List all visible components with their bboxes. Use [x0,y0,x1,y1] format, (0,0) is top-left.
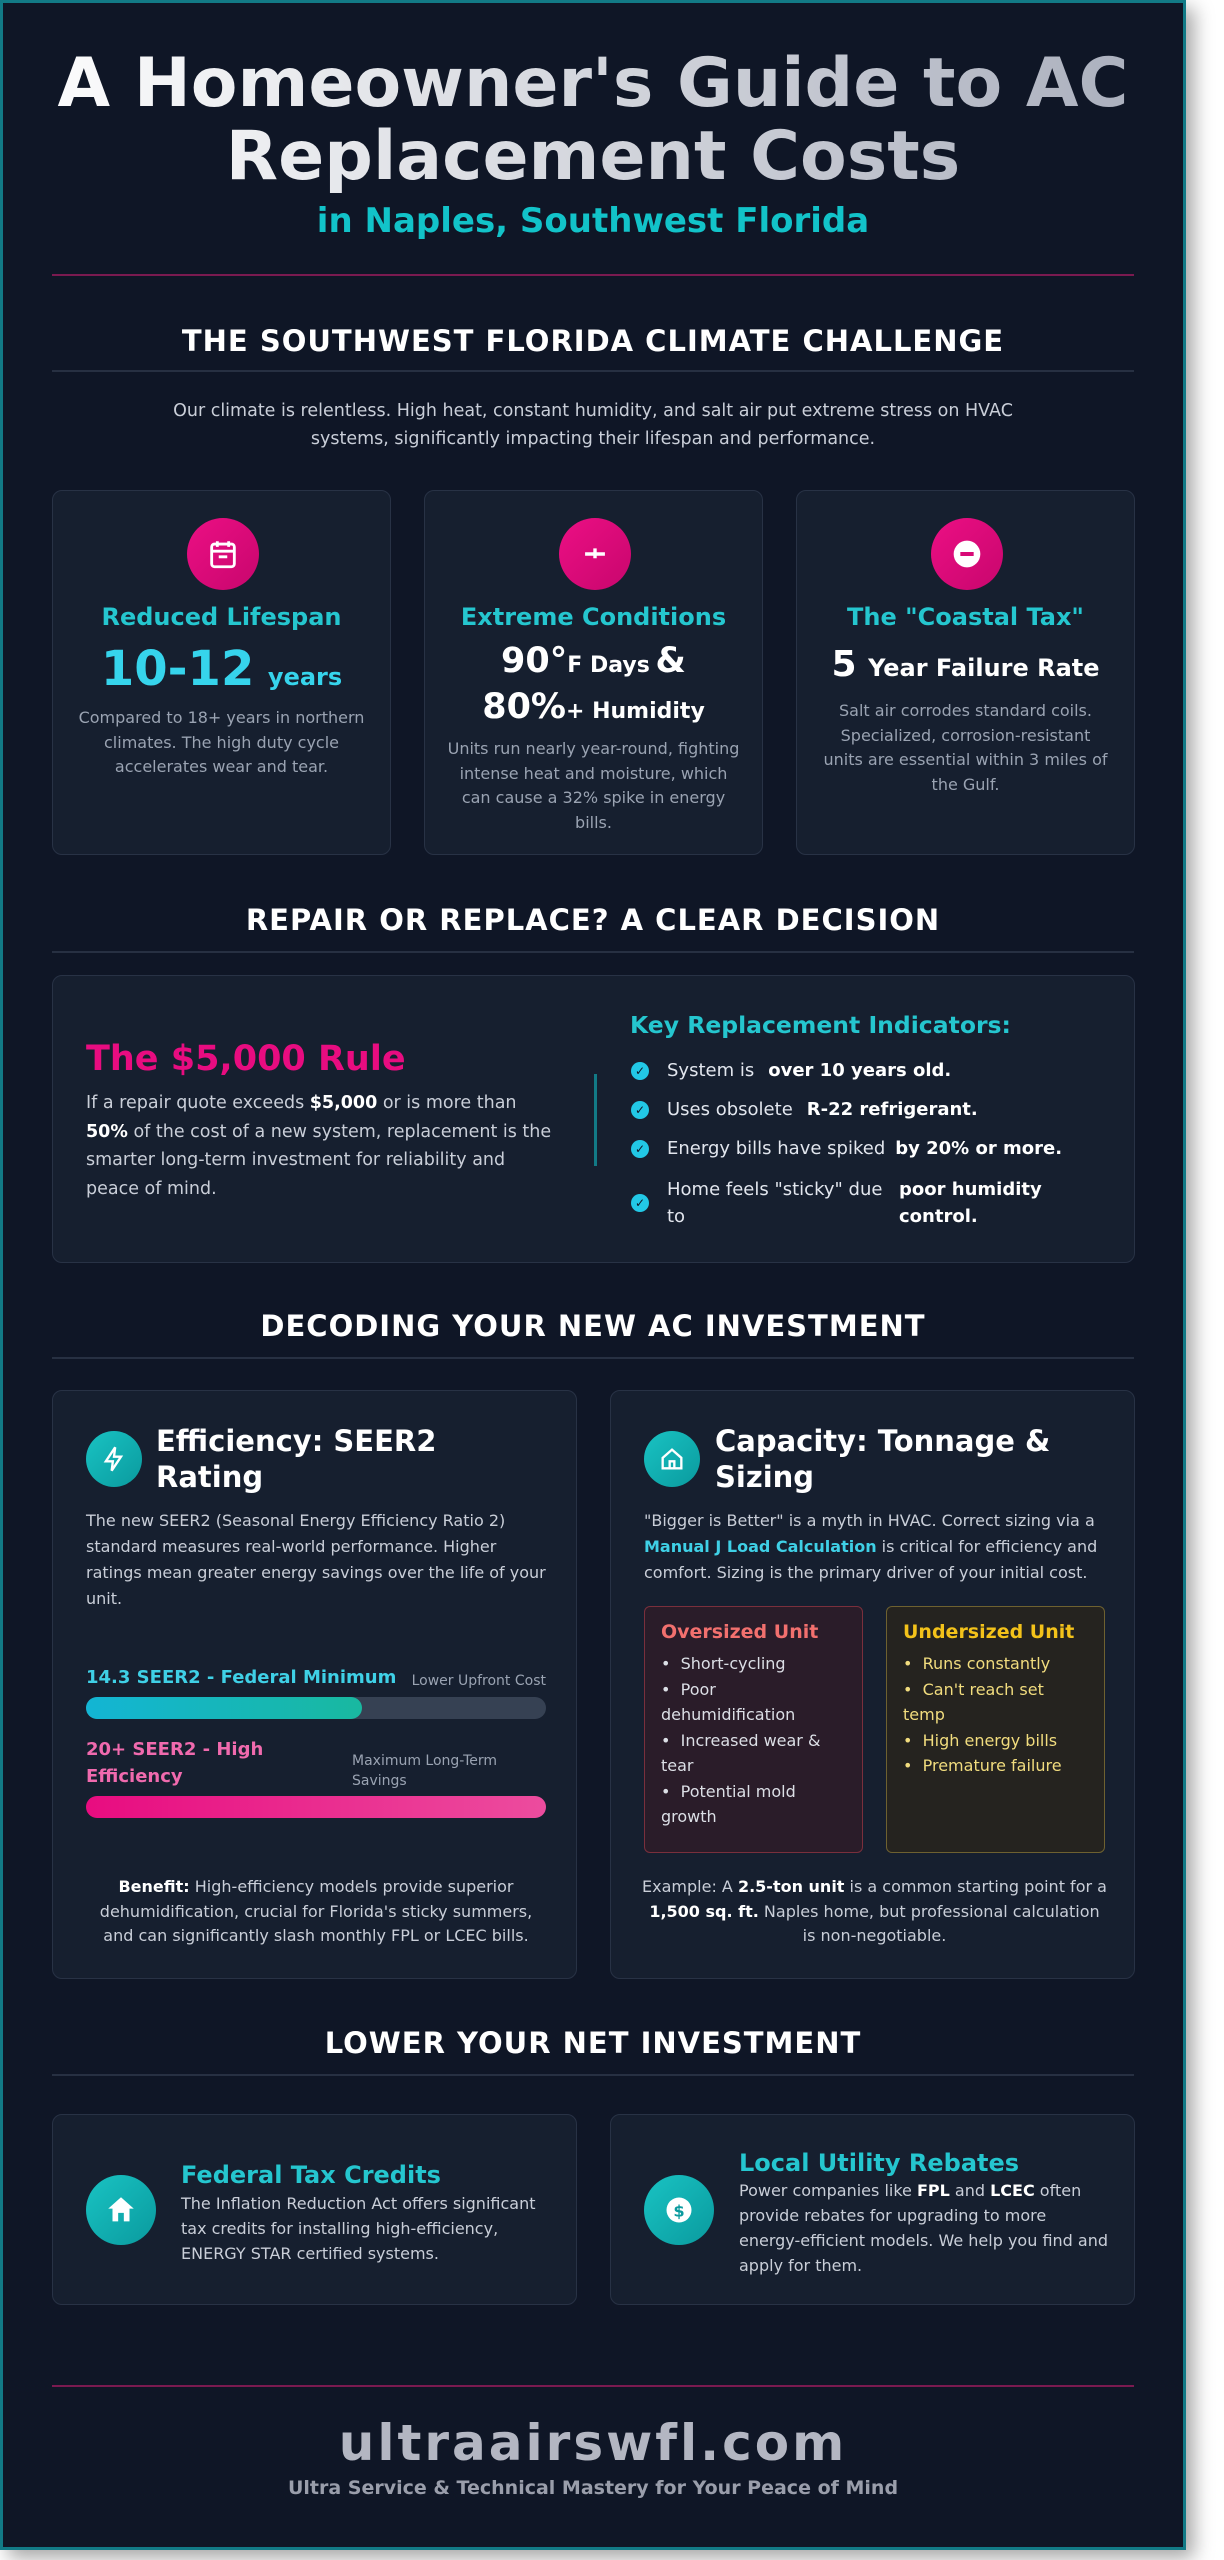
box: undersized: • Can't reach set temp [903,1680,1044,1724]
card title: Extreme Conditions [461,603,726,631]
box: oversized: Oversized Unit [661,1621,818,1643]
heading: Rating [156,1460,263,1494]
bar chart: SEER2 comparison: 14.3 SEER2 - Federal Minimum [86,1667,396,1688]
heading: lower net investment: LOWER YOUR NET INVESTMENT [325,2026,861,2060]
title: Replacement Costs [226,117,960,196]
box: oversized: • Increased wear & tear [661,1730,820,1775]
intro text: Our climate is relentless. High heat, constant humidity, and salt air put extreme stress on HVAC systems, significantly impacting their lifespan and performance. [173,401,1013,449]
list: indicators: Home feels "sticky" due to [667,1179,882,1227]
text: benefit: Benefit: High-efficiency models provide superior dehumidification, crucial for Florida's sticky summers, and can significantly slash monthly FPL or LCEC bills. [100,1877,532,1945]
stat: 10-12 years [101,641,342,697]
heading: Sizing [715,1460,814,1494]
text: rule explanation: If a repair quote exceeds $5,000 or is more than 50% of the cost of a new system, replacement is the smarter long-term investment for reliability and peace of mind. [86,1093,551,1198]
description: Salt air corrodes standard coils. Specialized, corrosion-resistant units are essential within 3 miles of the Gulf. [824,701,1107,794]
panel: utility rebates [610,2114,1135,2305]
panel: reduced lifespan [52,490,391,855]
heading: Capacity: Tonnage & [715,1424,1050,1458]
heading [156,1424,436,1494]
box: oversized: • Potential mold growth [661,1782,796,1826]
text: The Inflation Reduction Act offers significant tax credits for installing high-efficiency, ENERGY STAR certified systems. [181,2194,535,2263]
stat: 80%+ Humidity [482,687,705,727]
list: indicators: ✓ [635,1196,645,1210]
heading: climate challenge: THE SOUTHWEST FLORIDA CLIMATE CHALLENGE [182,324,1004,358]
heading: indicators: Key Replacement Indicators: [630,1011,1011,1039]
list: indicators: ✓ [635,1064,645,1078]
list: indicators: Uses obsolete [667,1099,793,1120]
text: Power companies like FPL and LCEC often provide rebates for upgrading to more energy-efficient models. We help you find and apply for them. [739,2181,1108,2275]
list: indicators: ✓ [635,1102,645,1116]
title: A Homeowner's Guide to AC [58,44,1128,123]
panel: decision [52,975,1135,1263]
title [3,47,1183,193]
card title: Reduced Lifespan [101,603,342,631]
heading: Efficiency: SEER2 [156,1424,436,1458]
panel: coastal tax [796,490,1135,855]
icon: house [644,1431,700,1487]
card title: The "Coastal Tax" [847,603,1084,631]
box: oversized: • Short-cycling [661,1654,786,1673]
stat [482,641,705,727]
icon: thermometer [559,518,631,590]
box: oversized: • Poor dehumidification [661,1680,795,1724]
description: Compared to 18+ years in northern climates. The high duty cycle accelerates wear and tear. [79,708,364,776]
description: Units run nearly year-round, fighting intense heat and moisture, which can cause a 32% spike in energy bills. [448,739,739,832]
list: indicators: by 20% or more. [895,1138,1062,1159]
heading [715,1424,1050,1494]
heading: $5,000 rule: The $5,000 Rule [86,1039,406,1079]
bar chart: SEER2 comparison: 20+ SEER2 - High Efficiency [86,1739,263,1787]
bar chart: SEER2 comparison: Maximum Long-Term Savings [352,1753,497,1789]
text: example: Example: A 2.5-ton unit is a common starting point for a 1,500 sq. ft. Naples home, but professional calculation is non-negotiable. [642,1877,1107,1945]
list: indicators: System is [667,1060,754,1081]
subtitle: in Naples, Southwest Florida [317,201,869,241]
heading: repair or replace: REPAIR OR REPLACE? A CLEAR DECISION [246,903,940,937]
panel: capacity [610,1390,1135,1979]
list: indicators: R-22 refrigerant. [807,1099,978,1120]
list: indicators: over 10 years old. [768,1060,951,1081]
box: undersized: • Runs constantly [903,1654,1050,1673]
box: undersized [886,1606,1105,1853]
panel: extreme conditions [424,490,763,855]
box: undersized: • Premature failure [903,1756,1062,1775]
box: undersized: Undersized Unit [903,1621,1074,1643]
footer: website: ultraairswfl.com [339,2414,847,2472]
title: Local Utility Rebates [739,2149,1019,2177]
list: indicators: Energy bills have spiked [667,1138,885,1159]
text: The new SEER2 (Seasonal Energy Efficiency Ratio 2) standard measures real-world performance. Higher ratings mean greater energy savings over the life of your unit. [86,1511,546,1608]
text: "Bigger is Better" is a myth in HVAC. Correct sizing via a Manual J Load Calculation is critical for efficiency and comfort. Sizing is the primary driver of your initial cost. [644,1511,1097,1582]
icon: house [86,2175,156,2245]
title: Federal Tax Credits [181,2161,441,2189]
footer: tagline: Ultra Service & Technical Mastery for Your Peace of Mind [288,2477,898,2499]
box: undersized: • High energy bills [903,1730,1057,1750]
list: indicators: ✓ [635,1142,645,1156]
list: indicators: poor humidity control. [899,1179,1042,1227]
panel: efficiency [52,1390,577,1979]
icon: bolt [86,1431,142,1487]
stat: 5 Year Failure Rate [831,644,1100,685]
icon: minus circle [931,518,1003,590]
panel: federal tax credits [52,2114,577,2305]
stat: 90°F Days & [501,641,686,681]
icon: calendar [187,518,259,590]
bar chart: SEER2 comparison: Lower Upfront Cost [412,1673,546,1689]
list: indicators [631,1060,1062,1227]
icon: coin: $ [673,2201,685,2220]
icon: coin [644,2175,714,2245]
box: oversized [644,1606,863,1853]
heading: decoding: DECODING YOUR NEW AC INVESTMENT [260,1309,926,1343]
bar chart: SEER2 comparison [86,1667,546,1818]
